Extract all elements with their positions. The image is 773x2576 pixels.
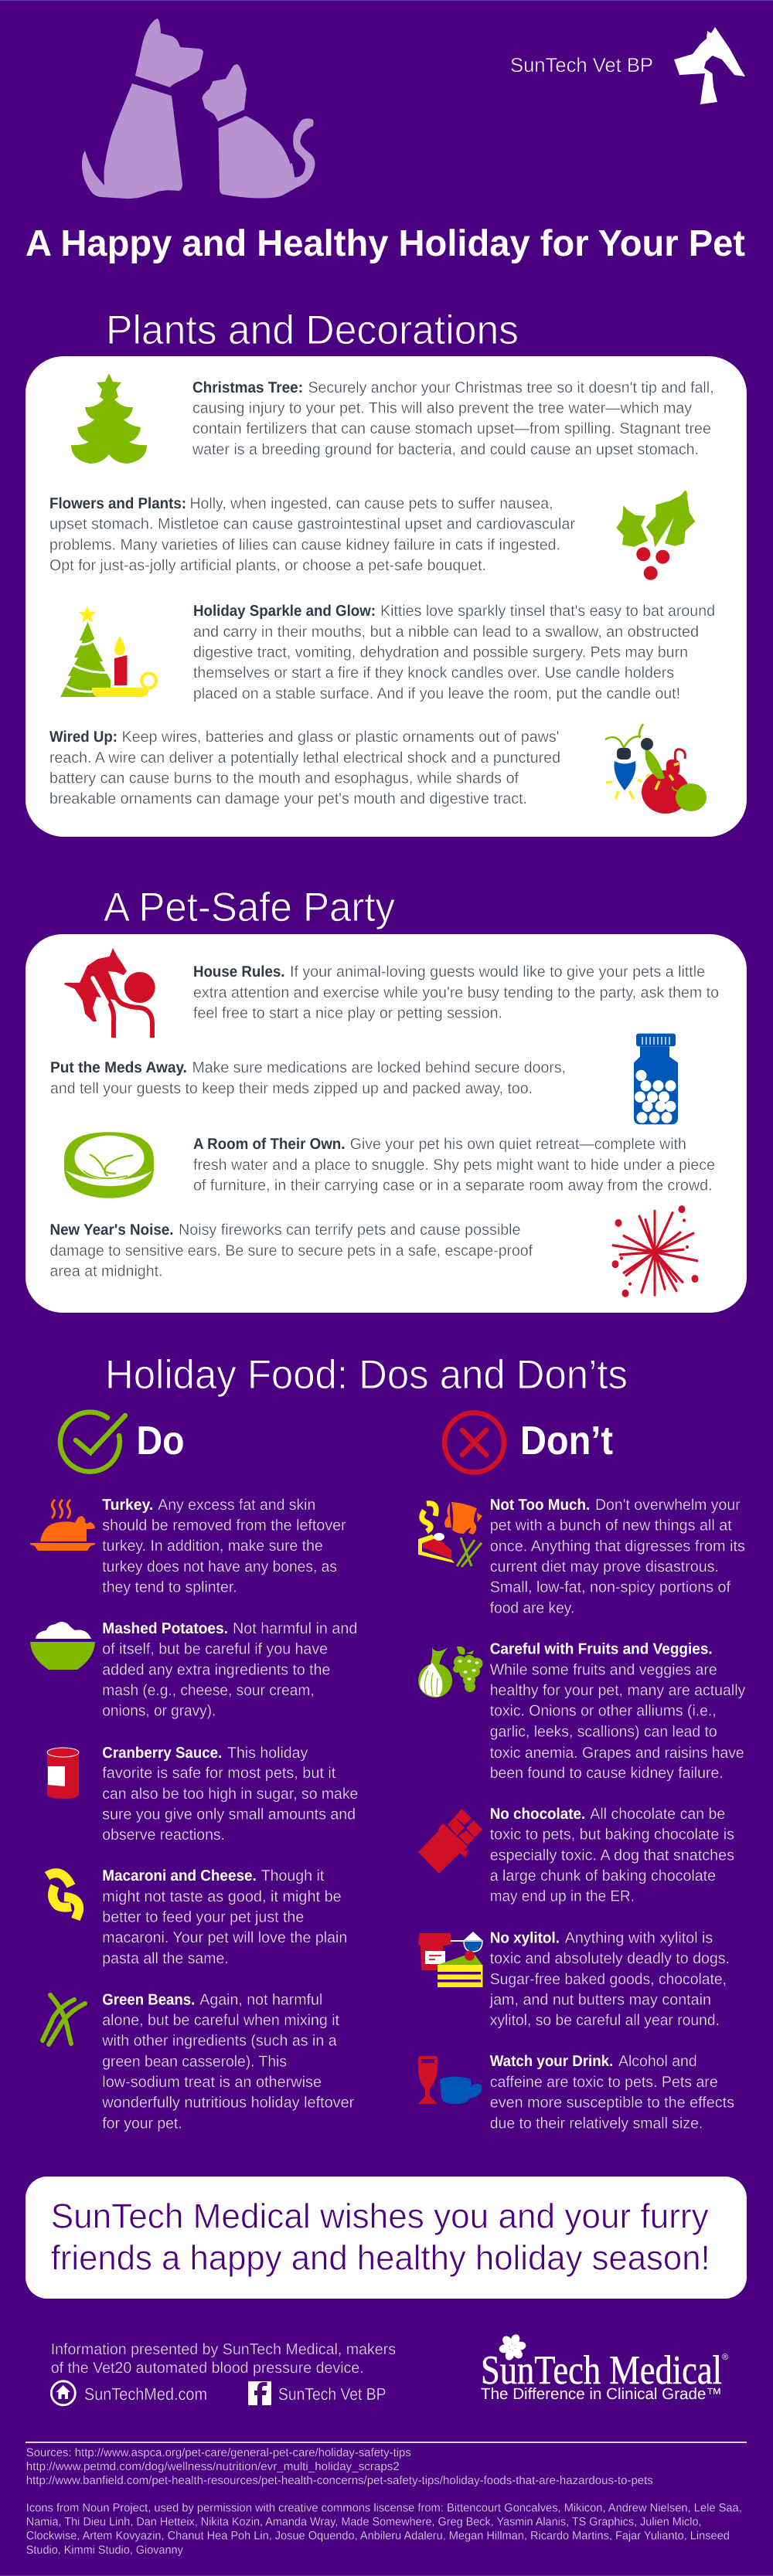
text: christmas tree: Securely anchor your Christmas tree so it doesn't tip and fall, bbox=[308, 379, 714, 396]
heading: Plants and Decorations: Plants and Decorations bbox=[106, 308, 519, 353]
text: macaroni and cheese: pasta all the same. bbox=[102, 1950, 229, 1967]
text: mashed potatoes: added any extra ingredients to the bbox=[102, 1661, 330, 1678]
icon: chocolate bar bbox=[418, 1809, 482, 1874]
icon: facebook bbox=[248, 2381, 271, 2405]
text: icon credits bbox=[26, 2502, 742, 2557]
text: no chocolate: a large chunk of baking chocolate bbox=[490, 1867, 716, 1884]
text: house rules: House Rules. bbox=[193, 963, 284, 980]
text: cranberry sauce: observe reactions. bbox=[102, 1827, 225, 1844]
icon: pet bed bbox=[64, 1132, 154, 1198]
label: SunTech Vet BP: SunTech Vet BP bbox=[278, 2384, 386, 2404]
text: christmas tree: Christmas Tree: bbox=[192, 379, 303, 396]
text: no chocolate: especially toxic. A dog that snatches bbox=[490, 1847, 734, 1864]
text: flowers and plants: upset stomach. Mistletoe can cause gastrointestinal upset and cardiovascular bbox=[49, 516, 575, 533]
text: macaroni and cheese: Macaroni and Cheese. bbox=[102, 1867, 257, 1884]
text: macaroni and cheese: might not taste as good, it might be bbox=[102, 1888, 342, 1905]
text: turkey: turkey. In addition, make sure the bbox=[102, 1538, 323, 1555]
text: no xylitol: Anything with xylitol is bbox=[565, 1930, 713, 1947]
text: wired up: Wired Up: bbox=[49, 729, 117, 746]
text: green beans bbox=[101, 1991, 355, 2132]
text: not too much: once. Anything that digresses from its bbox=[490, 1538, 745, 1555]
text: a room of their own: of furniture, in their carrying case or in a separate room away from the crowd. bbox=[193, 1178, 713, 1195]
text: green beans: Green Beans. bbox=[102, 1991, 195, 2008]
text: watch your drink: Watch your Drink. bbox=[490, 2053, 613, 2070]
text: mashed potatoes: Mashed Potatoes. bbox=[102, 1620, 228, 1637]
icon: mashed potatoes bbox=[30, 1622, 95, 1670]
text: no xylitol: No xylitol. bbox=[490, 1930, 560, 1947]
text: wired up: reach. A wire can deliver a potentially lethal electrical shock and a punctured bbox=[49, 749, 560, 766]
text: no chocolate: toxic to pets, but baking chocolate is bbox=[490, 1827, 734, 1844]
text: a room of their own: A Room of Their Own. bbox=[193, 1136, 345, 1153]
text: not too much: Don't overwhelm your bbox=[595, 1497, 741, 1514]
icon: wine glass and coffee cup bbox=[418, 2056, 482, 2104]
text: not too much: Small, low-fat, non-spicy portions of bbox=[490, 1579, 730, 1596]
text: a room of their own: fresh water and a place to snuggle. Shy pets might want to hide under a piece bbox=[193, 1157, 715, 1174]
text: careful with fruits and veggies: toxic. Onions or other alliums (i.e., bbox=[490, 1703, 717, 1720]
text: house rules: If your animal-loving guests would like to give your pets a little bbox=[290, 963, 705, 980]
text: turkey: they tend to splinter. bbox=[102, 1579, 237, 1596]
icon: turkey bbox=[30, 1500, 95, 1551]
text: no chocolate bbox=[490, 1806, 734, 1905]
text: icon credits: Namia, Thi Dieu Linh, Dan Hetteix, Nikita Kozin, Amanda Wray, Made Somewhere, Greg Beck, Yasmin Alanis, TS Graphics, Julien Miclo, bbox=[26, 2516, 702, 2529]
text: new year's noise bbox=[49, 1222, 533, 1280]
icon: white dog and cat logo bbox=[674, 27, 745, 104]
text: no xylitol: jam, and nut butters may contain bbox=[489, 1992, 711, 2009]
text: sources bbox=[26, 2446, 653, 2487]
text: house rules: extra attention and exercise while you're busy tending to the party, ask them to bbox=[193, 984, 719, 1001]
text: house rules: feel free to start a nice play or petting session. bbox=[193, 1004, 502, 1021]
text: presented by bbox=[51, 2341, 396, 2377]
text: no chocolate: No chocolate. bbox=[490, 1806, 585, 1823]
text: green beans: Again, not harmful bbox=[199, 1991, 322, 2008]
text: no chocolate: All chocolate can be bbox=[590, 1806, 725, 1823]
text: new year's noise: Noisy fireworks can terrify pets and cause possible bbox=[179, 1222, 521, 1239]
icon: playing dog with hand bbox=[64, 948, 155, 1038]
text: christmas tree: water is a breeding ground for bacteria, and could cause an upset stomach. bbox=[192, 441, 699, 458]
text: a room of their own bbox=[193, 1136, 715, 1195]
icon: logo flower bbox=[499, 2333, 526, 2361]
brand label: SunTech Vet BP: SunTech Vet BP bbox=[510, 53, 653, 76]
text: flowers and plants bbox=[49, 495, 575, 574]
facebook link bbox=[248, 2381, 386, 2405]
text: macaroni and cheese: better to feed your pet just the bbox=[102, 1908, 304, 1925]
label: Do: Do bbox=[136, 1419, 184, 1463]
text: put the meds away bbox=[50, 1059, 566, 1097]
icon: tree and candle bbox=[60, 606, 156, 697]
text: flowers and plants: problems. Many varieties of lilies can cause kidney failure in cats if ingested. bbox=[49, 536, 560, 553]
text: sources: Sources: http://www.aspca.org/pet-care/general-pet-care/holiday-safety-tips bbox=[26, 2446, 411, 2459]
closing message text: friends a happy and healthy holiday season! bbox=[51, 2238, 710, 2278]
text: turkey: Turkey. bbox=[102, 1497, 153, 1514]
text: turkey: turkey does not have any bones, as bbox=[102, 1558, 337, 1575]
text: flowers and plants: Flowers and Plants: bbox=[49, 495, 186, 512]
text: house rules bbox=[193, 963, 719, 1021]
text: holiday sparkle and glow: placed on a stable surface. And if you leave the room, put the candle out! bbox=[193, 685, 680, 702]
text: put the meds away: Put the Meds Away. bbox=[50, 1059, 187, 1076]
icon: macaroni bbox=[47, 1873, 79, 1919]
tagline: The Difference in Clinical Grade™ bbox=[481, 2385, 722, 2403]
text: no xylitol: Sugar-free baked goods, chocolate, bbox=[490, 1971, 727, 1988]
registered mark: ® bbox=[722, 2353, 728, 2362]
text: wired up: breakable ornaments can damage your pet's mouth and digestive tract. bbox=[49, 790, 527, 807]
text: holiday sparkle and glow: Holiday Sparkle and Glow: bbox=[193, 603, 376, 620]
icon: cross circle bbox=[444, 1412, 504, 1473]
text: green beans: low-sodium treat is an otherwise bbox=[102, 2074, 322, 2091]
text: watch your drink bbox=[490, 2053, 734, 2132]
closing message text bbox=[51, 2196, 710, 2278]
text: presented by: Information presented by SunTech Medical, makers bbox=[51, 2341, 396, 2358]
text: green beans: wonderfully nutritious holiday leftover bbox=[101, 2095, 355, 2112]
text: macaroni and cheese bbox=[102, 1867, 347, 1967]
text: flowers and plants: Holly, when ingested, can cause pets to suffer nausea, bbox=[190, 495, 553, 512]
text: not too much: Not Too Much. bbox=[490, 1497, 590, 1514]
heading: Holiday Food: Dos and Don'ts: Holiday Food: Dos and Don’ts bbox=[105, 1352, 628, 1398]
text: icon credits: Studio, Kimmi Studio, Giovanny bbox=[26, 2544, 183, 2557]
text: put the meds away: Make sure medications are locked behind secure doors, bbox=[192, 1059, 566, 1076]
text: watch your drink: even more susceptible to the effects bbox=[490, 2094, 734, 2111]
closing message text: SunTech Medical wishes you and your furry bbox=[51, 2196, 709, 2236]
icon: fireworks bbox=[612, 1205, 699, 1297]
text: not too much: food are key. bbox=[490, 1599, 574, 1616]
text: turkey: Any excess fat and skin bbox=[158, 1497, 315, 1514]
heading: A Pet-Safe Party: A Pet-Safe Party bbox=[104, 885, 395, 930]
do header bbox=[60, 1412, 185, 1472]
website link bbox=[51, 2381, 207, 2405]
icon: holly bbox=[616, 490, 695, 580]
icon: wires, bulbs and ornaments bbox=[605, 724, 707, 814]
text: cranberry sauce bbox=[102, 1745, 358, 1844]
text: green beans: with other ingredients (such as in a bbox=[101, 2033, 338, 2050]
text: cranberry sauce: sure you give only small amounts and bbox=[102, 1806, 356, 1823]
icon: onion and grapes bbox=[418, 1647, 482, 1698]
text: watch your drink: due to their relatively small size. bbox=[490, 2115, 703, 2132]
text: no chocolate: may end up in the ER. bbox=[490, 1888, 635, 1905]
text: wired up bbox=[49, 729, 560, 807]
label: Don't: Don’t bbox=[520, 1419, 613, 1463]
text: macaroni and cheese: macaroni. Your pet will love the plain bbox=[102, 1929, 347, 1946]
logo: SunTech Medical bbox=[481, 2333, 728, 2403]
icon: pill bottle bbox=[634, 1034, 678, 1124]
text: turkey: should be removed from the leftover bbox=[102, 1517, 346, 1534]
text: green beans: alone, but be careful when mixing it bbox=[102, 2012, 339, 2029]
text: new year's noise: New Year's Noise. bbox=[49, 1222, 173, 1239]
text: mashed potatoes: Not harmful in and bbox=[233, 1620, 357, 1637]
text: mashed potatoes: of itself, but be careful if you have bbox=[102, 1641, 328, 1658]
text: green beans: for your pet. bbox=[102, 2115, 182, 2132]
text: not too much: current diet may prove disastrous. bbox=[490, 1558, 719, 1575]
text: careful with fruits and veggies: been found to cause kidney failure. bbox=[490, 1765, 724, 1782]
text: holiday sparkle and glow: and carry in their mouths, but a nibble can lead to a swallow, an obstructed bbox=[193, 624, 699, 641]
panel: closing message bbox=[26, 2177, 747, 2299]
icon: check circle bbox=[60, 1412, 125, 1472]
icon: mixed foods bbox=[418, 1502, 482, 1567]
text: cranberry sauce: This holiday bbox=[227, 1745, 308, 1762]
label: SunTechMed.com: SunTechMed.com bbox=[84, 2384, 207, 2404]
text: icon credits: Clockwise, Artem Kovyazin, Chanut Hea Poh Lin, Josue Oquendo, Anbileru Adaleru, Megan Hillman, Ricardo Martins, Fajar Yulianto, Linseed bbox=[26, 2530, 730, 2543]
text: mashed potatoes bbox=[102, 1620, 357, 1720]
text: not too much: pet with a bunch of new things all at bbox=[490, 1517, 732, 1534]
text: careful with fruits and veggies: healthy for your pet, many are actually bbox=[490, 1682, 745, 1699]
text: cranberry sauce: Cranberry Sauce. bbox=[102, 1745, 222, 1762]
icon: jam, sugar spoon and cake bbox=[418, 1932, 482, 1987]
icon: christmas tree bbox=[71, 373, 147, 464]
text: watch your drink: caffeine are toxic to pets. Pets are bbox=[490, 2074, 718, 2091]
text: holiday sparkle and glow: themselves or start a fire if they knock candles over. Use candle holders bbox=[193, 664, 674, 681]
title: A Happy and Healthy Holiday for Your Pet bbox=[26, 223, 745, 264]
text: no xylitol: toxic and absolutely deadly to dogs. bbox=[490, 1950, 730, 1967]
text: careful with fruits and veggies: garlic, leeks, scallions) can lead to bbox=[490, 1723, 717, 1740]
icon: dog and cat silhouettes bbox=[82, 19, 315, 199]
text: wired up: battery can cause burns to the mouth and esophagus, while shards of bbox=[49, 770, 519, 787]
text: careful with fruits and veggies bbox=[490, 1641, 745, 1782]
text: sources: http://www.banfield.com/pet-health-resources/pet-health-concerns/pet-safety-tips/holiday-foods-that-are-hazardous-to-pets bbox=[26, 2474, 653, 2487]
text: no xylitol: xylitol, so be careful all year round. bbox=[490, 2012, 720, 2029]
text: holiday sparkle and glow bbox=[193, 603, 715, 702]
text: holiday sparkle and glow: Kitties love sparkly tinsel that's easy to bat around bbox=[380, 603, 715, 620]
icon: home bbox=[51, 2381, 75, 2405]
text: new year's noise: damage to sensitive ears. Be sure to secure pets in a safe, escape-proof bbox=[49, 1242, 533, 1259]
text: new year's noise: area at midnight. bbox=[49, 1263, 162, 1280]
text: holiday sparkle and glow: digestive tract, vomiting, dehydration and possible surgery. Pets may burn bbox=[193, 644, 688, 661]
wordmark: SunTech Medical bbox=[481, 2348, 722, 2393]
text: christmas tree: contain fertilizers that can cause stomach upset—from spilling. Stagnant tree bbox=[192, 420, 711, 437]
text: watch your drink: Alcohol and bbox=[618, 2053, 697, 2070]
panel: plants and decorations bbox=[26, 356, 747, 837]
text: green beans: green bean casserole). This bbox=[102, 2053, 287, 2070]
text: icon credits: Icons from Noun Project, used by permission with creative commons liscense from: Bittencourt Goncalves, Mikicon, Andrew Nielsen, Lele Saa, bbox=[26, 2502, 742, 2515]
text: mashed potatoes: mash (e.g., cheese, sour cream, bbox=[102, 1682, 315, 1699]
text: a room of their own: Give your pet his own quiet retreat—complete with bbox=[350, 1136, 686, 1153]
icon: green beans bbox=[43, 1995, 85, 2044]
icon: cranberry can bbox=[47, 1748, 79, 1799]
text: cranberry sauce: favorite is safe for most pets, but it bbox=[102, 1765, 336, 1782]
text: not too much bbox=[490, 1497, 745, 1616]
text: careful with fruits and veggies: Careful with Fruits and Veggies. bbox=[490, 1641, 713, 1658]
text: wired up: Keep wires, batteries and glass or plastic ornaments out of paws' bbox=[122, 729, 560, 746]
text: christmas tree: causing injury to your pet. This will also prevent the tree water—which may bbox=[192, 400, 692, 417]
text: christmas tree bbox=[192, 379, 714, 458]
text: flowers and plants: Opt for just-as-jolly artificial plants, or choose a pet-safe bouquet. bbox=[49, 557, 486, 574]
text: mashed potatoes: onions, or gravy). bbox=[102, 1703, 216, 1720]
panel: a pet-safe party bbox=[26, 934, 747, 1313]
text: no xylitol bbox=[489, 1930, 730, 2029]
text: cranberry sauce: can also be too high in sugar, so make bbox=[102, 1786, 358, 1803]
text: sources: http://www.petmd.com/dog/wellness/nutrition/evr_multi_holiday_scraps2 bbox=[26, 2460, 400, 2473]
text: macaroni and cheese: Though it bbox=[261, 1867, 325, 1884]
text: careful with fruits and veggies: toxic anemia. Grapes and raisins have bbox=[490, 1745, 744, 1762]
text: put the meds away: and tell your guests to keep their meds zipped up and packed away, too. bbox=[50, 1080, 533, 1097]
text: careful with fruits and veggies: While some fruits and veggies are bbox=[490, 1661, 717, 1678]
don't header bbox=[444, 1412, 613, 1473]
text: presented by: of the Vet20 automated blood pressure device. bbox=[51, 2360, 364, 2377]
text: turkey bbox=[102, 1497, 346, 1596]
